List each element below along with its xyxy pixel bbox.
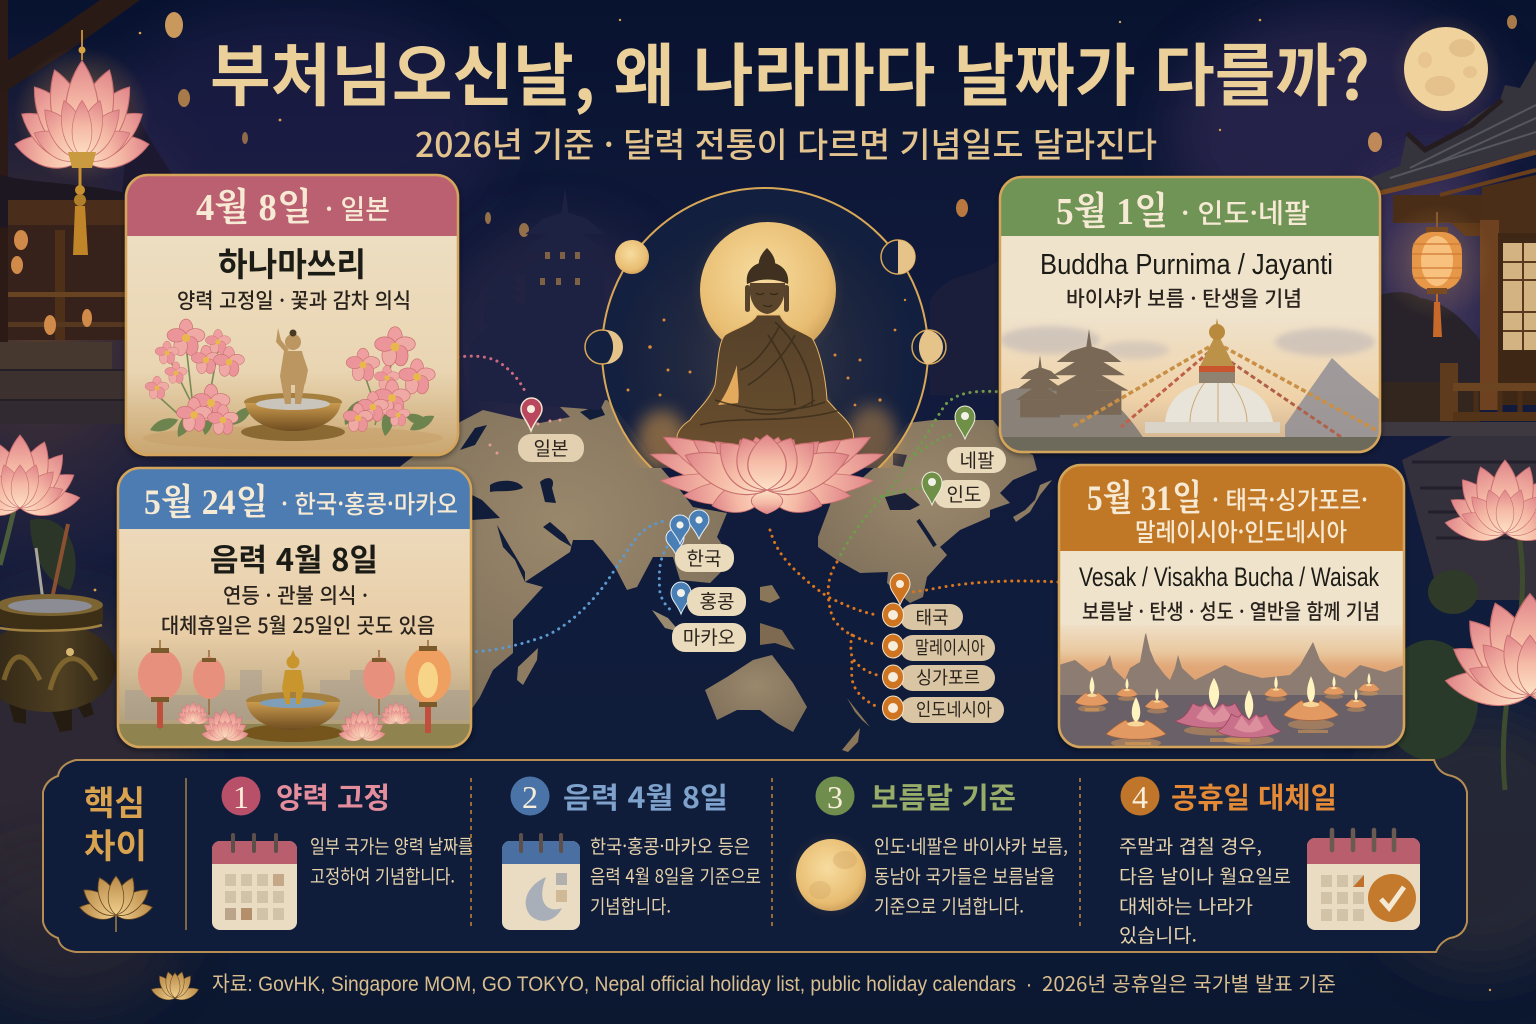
description: 보름날 · 탄생 · 성도 · 열반을 함께 기념 [1082,596,1380,626]
item 2: lunar April 8: 한국·홍콩·마카오 등은 [590,832,750,859]
item 1: solar fixed [212,775,473,930]
pin: Japan: 일본 [534,434,568,461]
pagoda silhouette [470,188,1000,410]
item 4: substitute holiday: 4 [1132,779,1148,815]
item 1: solar fixed: 일부 국가는 양력 날짜를 [310,832,473,859]
pins: Korea, Hong Kong, Macau [666,510,746,652]
subtitle: 2026년 기준 · 달력 전통이 다르면 기념일도 달라진다 [415,118,1157,167]
date heading [196,187,390,229]
pins: Korea, Hong Kong, Macau: 홍콩 [700,587,734,614]
scene: stupa with prayer flags [1000,318,1380,452]
card: Korea, Hong Kong, Macau May 24 [118,468,471,747]
item 2: lunar April 8: 음력 4월 8일을 기준으로 [590,862,761,889]
item 4: substitute holiday [1119,775,1420,948]
festival name: 음력 4월 8일 [210,535,378,580]
icon: gold lotus [78,874,154,932]
source note: · [1026,973,1032,996]
card: Japan April 8 [126,175,458,455]
baby Buddha statue [276,328,308,404]
scene: lanterns and Buddha [118,640,471,747]
date heading [1087,478,1368,549]
description [161,580,435,640]
icon: calendar with check [1307,830,1420,930]
scene: floating lamps and temples [1059,633,1404,748]
icon: footer lotus [150,971,200,1003]
center: Buddha with moon phases [585,188,946,520]
icon: moon [787,831,875,919]
item 4: substitute holiday: 다음 날이나 월요일로 [1119,862,1291,889]
pins: India, Nepal: 네팔 [960,446,994,473]
item 2: lunar April 8: 음력 4월 8일 [563,775,728,817]
item 2: lunar April 8 [502,775,761,930]
pins: Thailand, Malaysia, Singapore, Indonesia: 말레이시아 [915,634,985,660]
festival name: Vesak / Visakha Bucha / Waisak [1079,562,1379,592]
date heading: · 인도·네팔 [1181,192,1310,231]
route: SE Asia [770,530,1058,707]
item 3: full moon [787,775,1068,919]
item 4: substitute holiday: 있습니다. [1119,921,1197,948]
description: 대체휴일은 5월 25일인 곳도 있음 [161,610,435,640]
item 1: solar fixed: 양력 고정 [276,775,390,817]
icon: calendar [212,835,297,930]
route: India Nepal [838,391,1003,560]
right temple [1370,60,1536,600]
item 2: lunar April 8: 2 [522,779,538,815]
Buddha figure [677,248,854,457]
panel heading [84,776,147,868]
item 3: full moon: 보름달 기준 [871,775,1016,817]
icon: orange paper lantern [1379,204,1495,337]
item 3: full moon: 3 [827,779,843,815]
date heading: 5월 1일 [1056,191,1168,233]
pins: Thailand, Malaysia, Singapore, Indonesia [882,573,1004,723]
date heading [1056,191,1310,233]
item 1: solar fixed: 1 [233,779,249,815]
date heading: · 태국·싱가포르· [1212,481,1368,517]
phase moons [585,240,946,364]
card: Southeast Asia May 31 [1059,465,1404,748]
incense burner [0,524,116,732]
pins: Korea, Hong Kong, Macau: 마카오 [683,623,735,650]
item 3: full moon: 기준으로 기념합니다. [874,892,1024,919]
description: 바이샤카 보름 · 탄생을 기념 [1066,283,1302,313]
panel: key differences [43,760,1467,952]
date heading: 4월 8일 [196,187,312,229]
festival name: 하나마쓰리 [218,238,366,286]
date heading: 5월 24일 [144,482,268,522]
date heading: 말레이시아·인도네시아 [1135,513,1347,549]
left temple [0,0,230,424]
pins: India, Nepal: 인도 [947,480,981,507]
title: 부처님오신날, 왜 나라마다 날짜가 다를까? [210,21,1370,120]
date heading [144,482,458,522]
icon: hanging lotus lantern [13,30,151,255]
item 4: substitute holiday: 공휴일 대체일 [1171,775,1337,817]
gold Buddha statue [282,650,304,704]
top-right full moon [1390,13,1502,125]
route: Japan [458,356,527,395]
world map [396,392,1052,752]
pins: India, Nepal [922,406,1006,508]
item 1: solar fixed: 고정하여 기념합니다. [310,862,455,889]
item 3: full moon: 인도·네팔은 바이샤카 보름, [874,832,1068,859]
icon: calendar with crescent [502,835,580,930]
panel heading: 핵심 [84,776,145,825]
left pink lotus [0,435,82,590]
item 4: substitute holiday: 대체하는 나라가 [1119,892,1253,919]
route: Korea HK Macau [470,520,673,652]
pins: Korea, Hong Kong, Macau: 한국 [687,544,721,571]
item 2: lunar April 8: 기념합니다. [590,892,671,919]
right pink lotuses with leaves [1382,460,1536,790]
date heading: · 일본 [325,188,390,227]
description: 양력 고정일 · 꽃과 감차 의식 [177,285,411,315]
pins: Thailand, Malaysia, Singapore, Indonesia: 싱가포르 [916,664,980,690]
item 4: substitute holiday: 주말과 겹칠 경우, [1119,832,1262,859]
card: India, Nepal May 1 [1000,177,1380,452]
pin: Japan [518,398,584,462]
date heading: 5월 31일 [1087,478,1202,518]
source note: 2026년 공휴일은 국가별 발표 기준 [1042,968,1336,997]
scene: flowers and baby Buddha [143,319,443,450]
pins: Thailand, Malaysia, Singapore, Indonesia: 태국 [915,604,949,630]
description: 연등 · 관불 의식 · [223,580,368,610]
panel heading: 차이 [84,819,147,868]
pins: Thailand, Malaysia, Singapore, Indonesia: 인도네시아 [916,696,992,722]
item 3: full moon: 동남아 국가들은 보름날을 [874,862,1055,889]
lotus pedestal [647,424,887,520]
source note: 자료: GovHK, Singapore MOM, GO TOKYO, Nepal official holiday list, public holiday calendars [212,973,1016,996]
festival name: Buddha Purnima / Jayanti [1040,249,1333,281]
date heading: · 한국·홍콩·마카오 [281,485,458,521]
source note [212,968,1336,997]
